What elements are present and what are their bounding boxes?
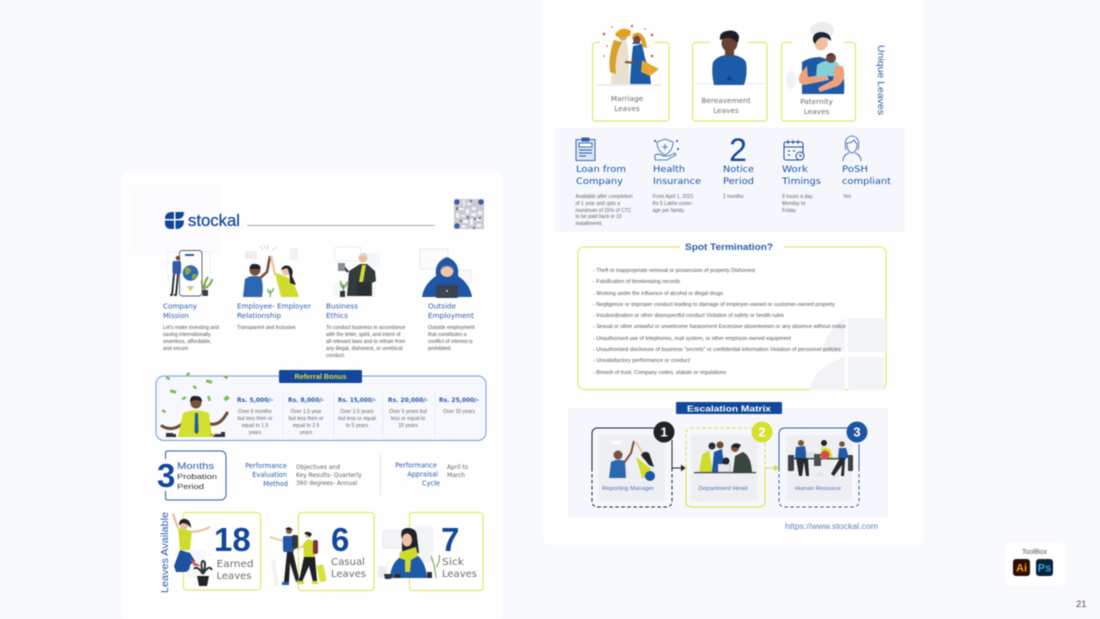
- callout: probation period: Months: [177, 461, 214, 472]
- icon: Illustrator: Ai: [1016, 562, 1027, 574]
- tier: 5000: equal to 1.5: [242, 423, 268, 429]
- section: company mission: [163, 250, 219, 352]
- text: performance evaluation method: Performance: [245, 462, 287, 470]
- text: business ethics: conduct.: [326, 353, 345, 359]
- item: work timings: Timings: [781, 177, 821, 187]
- illustration: travellers: [270, 527, 327, 586]
- callout: probation period: 3: [157, 457, 175, 494]
- item: work timings: Friday: [782, 208, 796, 214]
- item: loan from company: Company: [576, 177, 624, 187]
- text: outside employment: that constitutes a: [428, 332, 467, 338]
- item: notice period: Period: [723, 177, 754, 187]
- text: company mission: and secure: [163, 346, 188, 352]
- item: notice period: Notice: [723, 165, 754, 175]
- item: work timings: Work: [782, 165, 809, 175]
- icon: shield and hand: [654, 139, 679, 160]
- item: loan from company: installments: [576, 221, 602, 227]
- card: casual leaves: [270, 512, 374, 590]
- text: outside employment: prohibited.: [428, 346, 452, 352]
- tier: 15000: [338, 396, 376, 429]
- step 2: department head: 2: [758, 424, 766, 440]
- step 2: department head: Department Head: [698, 486, 748, 492]
- text: performance appraisal cycle: [395, 462, 469, 488]
- tag: escalation matrix: [676, 402, 782, 414]
- card: paternity leaves: Leaves: [804, 107, 829, 116]
- dividers: [283, 391, 435, 438]
- item: work timings: Monday to: [782, 201, 806, 207]
- illustration: team at laptop: [694, 442, 756, 473]
- step 3: human resource: [779, 422, 868, 507]
- text: performance appraisal cycle: April to: [447, 465, 469, 471]
- item: posh compliant: [842, 136, 892, 200]
- tier: 15000: Over 2.5 years: [340, 409, 374, 415]
- text: performance appraisal cycle: Appraisal: [407, 470, 438, 478]
- tier: 20000: [388, 396, 428, 429]
- text: business ethics: with the letter, spirit, and intent of: [326, 332, 401, 338]
- list: termination reasons: - Unsatisfactory performance or conduct: [593, 358, 691, 364]
- list: termination reasons: [593, 268, 846, 376]
- tag: referral bonus: Referral Bonus: [294, 372, 346, 381]
- illustration: hooded figure with laptop: [420, 249, 472, 298]
- text: company mission: Let's make investing and: [163, 325, 219, 331]
- item: health insurance: Health: [653, 165, 685, 175]
- item: work timings: [781, 140, 821, 214]
- card: marriage leaves: Leaves: [614, 104, 640, 113]
- logo: stockal: stockal: [188, 212, 240, 230]
- list: termination reasons: - Sexual or other unlawful or unwelcome harassment Excessive absenteeism or any absence without notice: [593, 324, 846, 330]
- tier: 8000: Over 1.5 year: [291, 409, 322, 415]
- tier: 5000: years: [249, 430, 262, 436]
- tier: 25000: Over 10 years: [443, 409, 475, 415]
- item: posh compliant: Yes: [843, 194, 852, 200]
- tag: referral bonus: [279, 370, 362, 383]
- text: outside employment: conflict of interest is: [428, 339, 473, 345]
- item: health insurance: [652, 139, 702, 214]
- illustration: high five: [243, 245, 299, 297]
- item: posh compliant: compliant: [842, 177, 892, 187]
- card: bereavement leaves: [692, 31, 767, 121]
- step 1: reporting manager: [592, 422, 674, 507]
- list: termination reasons: - Unauthorised disclosure of business "secrets" or confidential information Violation of personnel policies: [593, 347, 842, 353]
- illustration: businessman: [334, 247, 380, 297]
- card: casual leaves: Casual: [331, 557, 365, 568]
- illustration: high five: [609, 441, 655, 481]
- tier: 25000: Rs. 25,000/-: [439, 396, 479, 404]
- item: health insurance: Rs 5 Lakhs cover-: [652, 201, 693, 207]
- list: termination reasons: - Unauthorised use of telephones, mail system, or other employer-owned equipment: [593, 336, 792, 342]
- card: marriage leaves: Marriage: [611, 94, 644, 103]
- heading: company mission: Company: [163, 302, 198, 310]
- item: posh compliant: PoSH: [842, 165, 868, 175]
- list: termination reasons: - Insubordination or other disrespectful conduct Violation of safety or health rules: [593, 313, 785, 319]
- panel: spot termination: Spot Termination?: [685, 242, 773, 253]
- callout: probation period: Probation: [177, 472, 217, 481]
- divider: [379, 453, 382, 496]
- card: casual leaves: 6: [331, 521, 349, 558]
- icon: loan document: [576, 138, 595, 160]
- label: unique leaves: Unique Leaves: [876, 45, 886, 116]
- arrow: step 1 to step 2: [672, 440, 686, 472]
- heading: employee relationship: Relationship: [237, 311, 281, 320]
- heading: employee relationship: Employee- Employer: [237, 302, 311, 310]
- item: notice period: [723, 132, 754, 200]
- heading: business ethics: Business: [326, 302, 358, 310]
- tier: 15000: but less or equal: [338, 416, 376, 422]
- section: outside employment: [420, 249, 475, 352]
- tier: 20000: Over 5 years but: [389, 409, 427, 415]
- item: loan from company: maximum of 15% of CTC: [576, 208, 632, 214]
- text: performance appraisal cycle: March: [447, 473, 465, 479]
- step 3: human resource: Human Resource: [795, 486, 841, 492]
- card: earned leaves: 18: [214, 521, 251, 558]
- item: loan from company: Loan from: [576, 165, 626, 175]
- label: leaves available: Leaves Available: [160, 512, 171, 593]
- section: business ethics: [326, 247, 405, 359]
- step 1: reporting manager: Reporting Manager: [602, 486, 654, 492]
- panel: toolbox: ToolBox: [1022, 549, 1047, 556]
- illustration: jumping woman: [173, 514, 212, 586]
- text: employee relationship: Transparent and Inclusive: [237, 325, 296, 331]
- illustration: father and baby: [786, 22, 844, 94]
- text: performance evaluation method: 360 degrees- Annual: [296, 481, 358, 487]
- tier: 8000: years: [300, 430, 313, 436]
- illustration: man with money: [162, 372, 230, 437]
- list: termination reasons: - Working under the influence of alcohol or illegal drugs: [593, 291, 724, 297]
- list: termination reasons: - Negligence or improper conduct leading to damage of employer-owned or customer-owned property: [593, 302, 836, 308]
- item: notice period: 2: [729, 132, 747, 168]
- tier: 15000: Rs. 15,000/-: [338, 396, 376, 404]
- text: company mission: seamless, affordable,: [163, 339, 211, 345]
- tier: 8000: equal to 2.5: [293, 423, 319, 429]
- tier: 8000: [288, 396, 324, 436]
- tier: 20000: Rs. 20,000/-: [388, 396, 428, 404]
- text: performance evaluation method: Key Results- Quarterly: [296, 473, 362, 479]
- callout: probation period: [157, 451, 226, 500]
- card: sick leaves: Sick: [442, 557, 464, 568]
- tier: 5000: but less then or: [238, 416, 273, 422]
- icon: calendar and clock: [784, 140, 804, 160]
- item: loan from company: of 1 year and upto a: [576, 201, 620, 207]
- page number: 21: [1076, 599, 1087, 610]
- text: performance evaluation method: Evaluation: [252, 471, 287, 479]
- item: health insurance: age per family.: [652, 208, 685, 214]
- arrow: step 2 to step 3: [765, 464, 778, 472]
- card: bereavement leaves: Leaves: [713, 106, 739, 115]
- text: performance evaluation method: Objectives and: [296, 465, 340, 471]
- tier: 20000: less or equal to: [391, 416, 425, 422]
- text: business ethics: any illegal, dishonest, or unethical: [326, 346, 402, 352]
- tier: 8000: but less then or: [289, 416, 324, 422]
- heading: outside employment: Employment: [428, 311, 474, 320]
- list: termination reasons: - Theft or inappropriate removal or possession of property Dishonest: [593, 268, 756, 274]
- card: paternity leaves: Paternity: [800, 97, 833, 106]
- illustration: wedding couple: [596, 25, 662, 86]
- card: paternity leaves: [782, 22, 856, 121]
- list: termination reasons: - Falsification of timekeeping records: [593, 279, 681, 285]
- panel: right poster: [543, 0, 924, 545]
- callout: probation period: Period: [177, 482, 204, 491]
- link: website: https://www.stockal.com: [785, 522, 878, 531]
- text: business ethics: all relevant laws and to refrain from: [326, 339, 405, 345]
- card: earned leaves: Earned: [216, 559, 254, 570]
- heading: outside employment: Outside: [428, 302, 457, 310]
- panel: spot termination: [578, 242, 886, 390]
- tier: 5000: [237, 396, 273, 436]
- panel: referral bonus: [156, 370, 486, 440]
- panel: escalation matrix: [568, 402, 888, 518]
- icon: Photoshop: Ps: [1038, 562, 1051, 574]
- icon: QR code: [454, 199, 484, 229]
- text: performance appraisal cycle: Cycle: [422, 480, 440, 488]
- item: work timings: 9 hours a day,: [782, 194, 813, 200]
- tier: 20000: 10 years: [398, 423, 418, 429]
- tier: 8000: Rs. 8,000/-: [288, 396, 324, 404]
- card: earned leaves: Leaves: [216, 571, 252, 582]
- tier: 5000: Rs. 5,000/-: [237, 396, 273, 404]
- list: termination reasons: - Breach of trust, Company codes, statute or regulations: [593, 370, 727, 376]
- text: performance evaluation method: Method: [263, 480, 288, 488]
- tier: 25000: [439, 396, 479, 415]
- card: earned leaves: [173, 512, 260, 590]
- item: loan from company: to be paid back in 10: [576, 214, 622, 220]
- step 3: human resource: 3: [853, 424, 861, 440]
- text: business ethics: To conduct business in accordance: [326, 325, 405, 331]
- item: loan from company: Available after completion: [576, 194, 633, 200]
- panel: left poster: [121, 171, 503, 619]
- card: casual leaves: Leaves: [331, 569, 366, 580]
- card: sick leaves: 7: [441, 521, 459, 558]
- text: performance appraisal cycle: Performance: [395, 462, 437, 470]
- tier: 15000: to 5 years: [346, 423, 369, 429]
- icon: woman outline: [843, 136, 861, 161]
- heading: company mission: Mission: [163, 311, 189, 320]
- card: sick leaves: [378, 512, 483, 590]
- card: marriage leaves: [592, 25, 669, 121]
- step 1: reporting manager: 1: [660, 424, 668, 440]
- step 2: department head: [686, 422, 772, 507]
- panel: benefits band: [555, 128, 905, 232]
- item: notice period: 2 months: [723, 194, 744, 200]
- item: health insurance: Insurance: [653, 177, 702, 187]
- text: company mission: saving internationally,: [163, 332, 212, 338]
- item: health insurance: From April 1, 2021: [652, 194, 694, 200]
- text: performance evaluation method: [245, 462, 362, 488]
- illustration: sick woman: [378, 526, 440, 579]
- heading: business ethics: Ethics: [326, 311, 348, 320]
- tag: escalation matrix: Escalation Matrix: [687, 404, 771, 414]
- card: bereavement leaves: Bereavement: [701, 96, 751, 105]
- illustration: phone and globe: [168, 250, 212, 296]
- illustration: mourning man: [695, 31, 765, 85]
- section: employee relationship: [237, 245, 311, 331]
- panel: toolbox: [1005, 543, 1065, 585]
- illustration: meeting table: [788, 440, 853, 476]
- logo: stockal: [165, 212, 240, 230]
- text: outside employment: Outside employment: [428, 325, 475, 331]
- tier: 5000: Over 6 months: [238, 409, 272, 415]
- header rule: [247, 224, 435, 227]
- logo watermark: [810, 318, 886, 390]
- item: loan from company: [576, 138, 633, 227]
- card: sick leaves: Leaves: [442, 569, 477, 580]
